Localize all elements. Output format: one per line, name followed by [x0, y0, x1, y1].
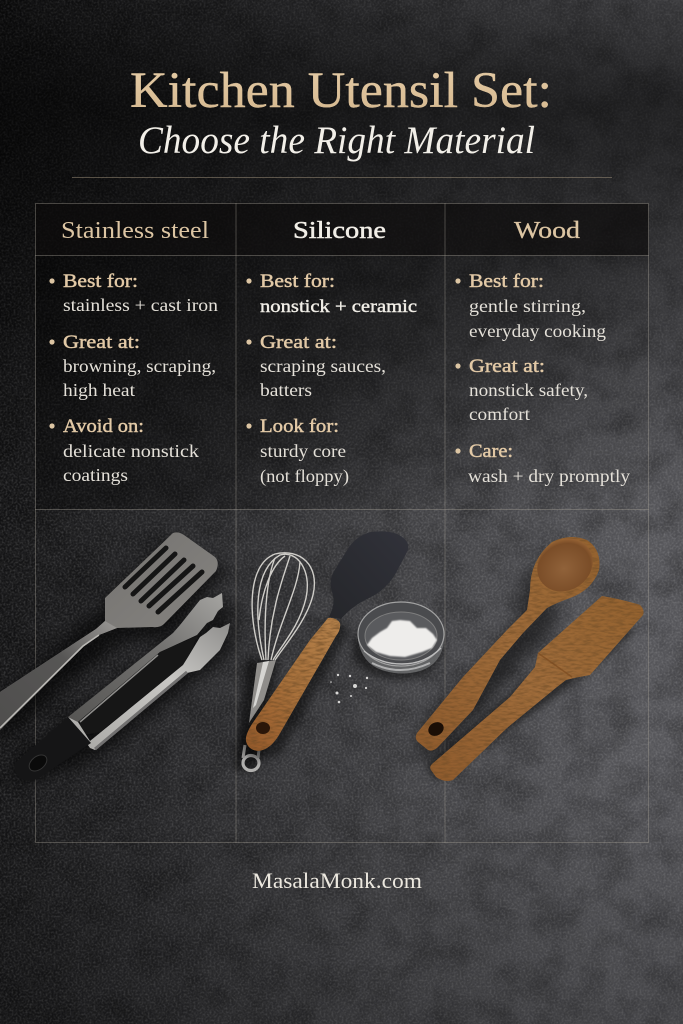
panel: stainless steel notes: stainless + cast iron	[63, 295, 218, 315]
title	[130, 63, 552, 162]
title: Kitchen Utensil Set:	[130, 63, 552, 119]
footer site name: MasalaMonk.com	[252, 868, 422, 893]
panel: wood notes: wash + dry promptly	[468, 466, 630, 486]
panel: wood notes: everyday cooking	[469, 321, 606, 341]
panel: stainless steel notes: Great at:	[63, 333, 140, 353]
panel: wood notes: gentle stirring,	[469, 296, 586, 316]
panel: silicone notes	[246, 272, 417, 486]
panel: wood notes: Great at:	[469, 357, 545, 377]
illustration: glass bowl of salt	[330, 602, 444, 703]
column heading: silicone: Silicone	[293, 218, 386, 244]
panel: silicone notes: Great at:	[260, 333, 337, 353]
panel: wood notes	[455, 272, 630, 486]
illustration: silicone spatula	[240, 531, 408, 760]
panel: stainless steel notes: browning, scraping,	[63, 356, 216, 376]
column heading: stainless steel: Stainless steel	[61, 218, 209, 244]
panel: silicone notes: sturdy core	[260, 441, 346, 461]
panel: stainless steel notes: delicate nonstick	[63, 441, 199, 461]
panel: silicone notes: scraping sauces,	[260, 356, 386, 376]
panel: silicone notes: (not floppy)	[260, 466, 349, 486]
panel: stainless steel notes: Avoid on:	[63, 417, 144, 437]
panel: stainless steel notes: coatings	[63, 465, 128, 485]
panel: silicone notes: Best for:	[260, 272, 335, 292]
panel: silicone notes: nonstick + ceramic	[260, 296, 417, 316]
illustration: wooden spoon	[415, 528, 603, 760]
illustration: wooden spatula	[426, 596, 644, 781]
panel: stainless steel notes: Best for:	[63, 272, 138, 292]
panel: stainless steel notes: high heat	[63, 380, 135, 400]
panel: wood notes: comfort	[469, 404, 530, 424]
panel: stainless steel notes	[49, 272, 218, 485]
column heading: wood: Wood	[514, 218, 580, 244]
illustration: stainless spatula	[0, 532, 226, 742]
panel: wood notes: Care:	[469, 442, 513, 462]
illustration: stainless tongs	[10, 593, 235, 785]
panel: wood notes: nonstick safety,	[469, 380, 588, 400]
panel: wood notes: Best for:	[469, 272, 544, 292]
subtitle: Choose the Right Material	[138, 119, 535, 162]
comparison table frame	[35, 203, 649, 843]
panel: silicone notes: Look for:	[260, 417, 339, 437]
illustration: whisk	[234, 553, 314, 770]
panel: silicone notes: batters	[260, 380, 312, 400]
